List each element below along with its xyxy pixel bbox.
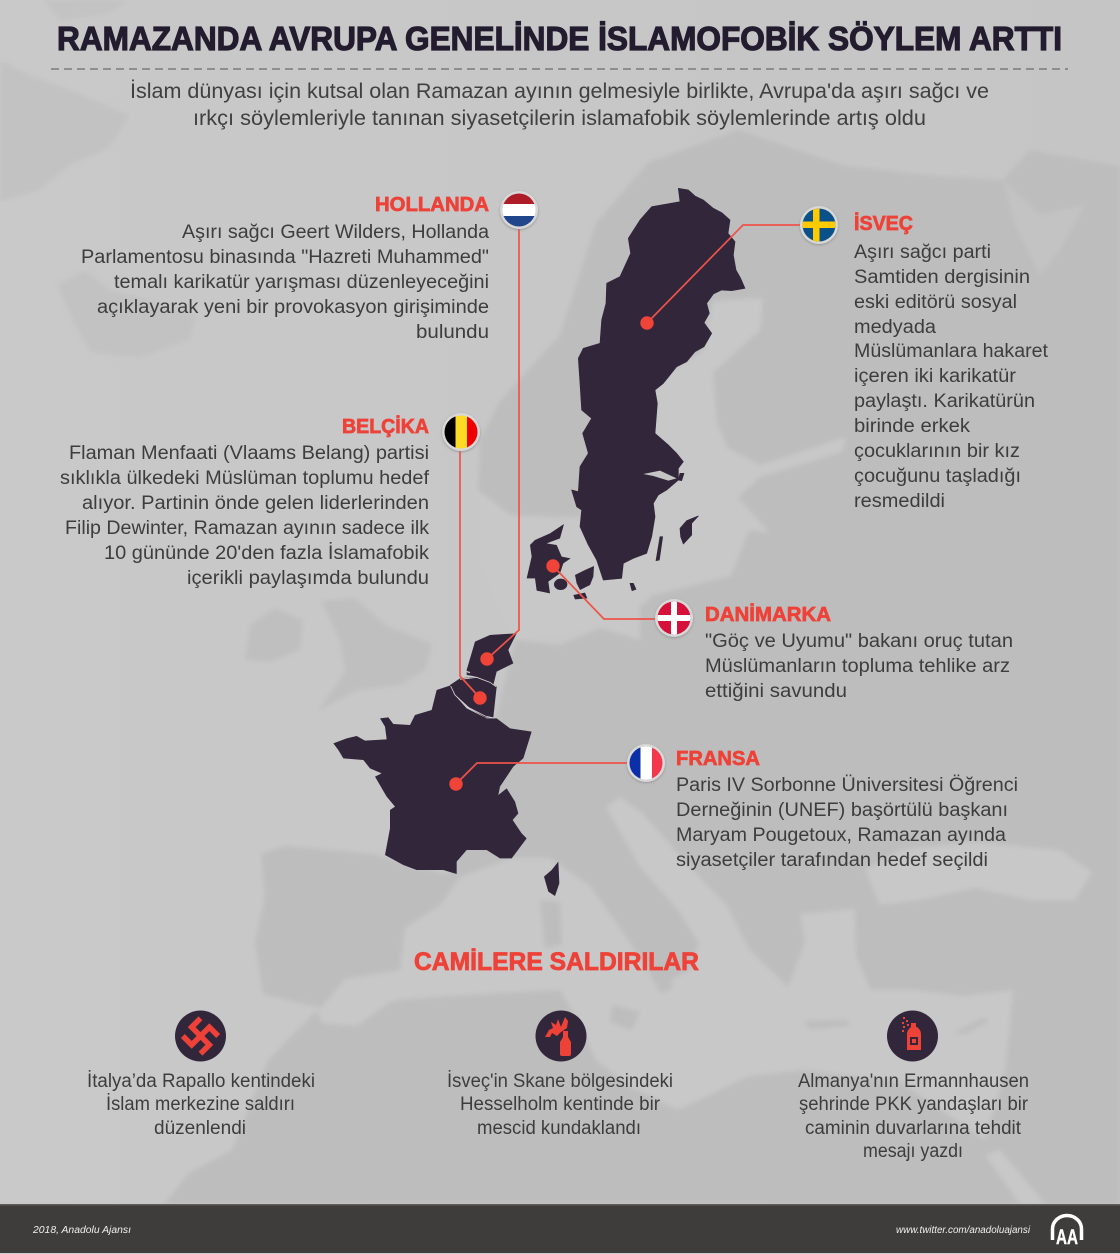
panel: Hollanda (81, 191, 538, 343)
text: Germany: şehrinde PKK yandaşları bir (799, 1094, 1029, 1115)
panel: Italy attack (87, 1010, 315, 1139)
intro text: ırkçı söylemleriyle tanınan siyasetçilerin islamafobik söylemlerinde artış oldu (193, 107, 926, 130)
footer bar (0, 1204, 1120, 1254)
text: İsveç: birinde erkek (854, 416, 971, 437)
text: Belçika: Flaman Menfaati (Vlaams Belang) partisi (69, 443, 429, 464)
text: Germany: caminin duvarlarına tehdit (805, 1118, 1022, 1139)
text: Hollanda: bulundu (416, 322, 489, 343)
title: RAMAZANDA AVRUPA GENELİNDE İSLAMOFOBİK SÖYLEM ARTTI (57, 20, 1062, 57)
text: İsveç: çocuklarının bir kız (854, 441, 1020, 462)
map: Corsica (544, 862, 559, 896)
text: İsveç: Aşırı sağcı parti (854, 242, 991, 263)
text: Belçika: sıklıkla ülkedeki Müslüman toplumu hedef (60, 468, 430, 489)
intro text: İslam dünyası için kutsal olan Ramazan ayının gelmesiyle birlikte, Avrupa'da aşırı sağcı ve (130, 80, 989, 103)
heading: Hollanda: HOLLANDA (375, 194, 489, 216)
text: Sweden: İsveç'in Skane bölgesindeki (447, 1071, 673, 1092)
panel: Sweden attack (447, 1010, 673, 1139)
text: Hollanda (81, 222, 489, 343)
panel: Germany attack (798, 1010, 1029, 1162)
text: İsveç: Samtiden dergisinin (854, 267, 1030, 288)
text: Fransa: siyasetçiler tarafından hedef seçildi (676, 850, 988, 871)
text: Danimarka: Müslümanların topluma tehlike arz (705, 656, 1010, 677)
text: Italy: İtalya’da Rapallo kentindeki (87, 1071, 315, 1092)
connector lines (456, 225, 801, 784)
text: Belçika: alıyor. Partinin önde gelen liderlerinden (82, 493, 429, 514)
flag: France (627, 744, 665, 782)
text: Germany (798, 1071, 1029, 1162)
text: Germany: mesajı yazdı (863, 1141, 963, 1162)
heading: Fransa: FRANSA (676, 748, 760, 770)
text: İsveç: medyada (854, 317, 936, 338)
text: Hollanda: Parlamentosu binasında "Hazreti Muhammed" (81, 247, 489, 268)
icon: spray can (887, 1010, 938, 1062)
footer credit: 2018, Anadolu Ajansı (32, 1225, 131, 1236)
flag: Denmark (655, 599, 693, 637)
text: Danimarka: "Göç ve Uyumu" bakanı oruç tutan (705, 631, 1013, 652)
panel: Fransa (627, 744, 1018, 871)
text: Sweden (447, 1071, 673, 1139)
text: İsveç: çocuğunu taşladığı (854, 466, 1021, 487)
text: Hollanda: açıklayarak yeni bir provokasyon girişiminde (97, 297, 489, 318)
text: Belçika: Filip Dewinter, Ramazan ayının sadece ilk (65, 518, 430, 539)
panel: Belçika (60, 413, 480, 589)
text: Germany: Almanya'nın Ermannhausen (798, 1071, 1029, 1092)
flag: Belgium (442, 413, 480, 451)
text: Danimarka: ettiğini savundu (705, 681, 847, 702)
text: Fransa: Paris IV Sorbonne Üniversitesi Öğrenci (676, 775, 1018, 796)
heading: Danimarka: DANİMARKA (705, 603, 831, 626)
intro text (130, 80, 989, 130)
text: Belçika: 10 gününde 20'den fazla İslamafobik (104, 543, 430, 564)
text: İsveç: paylaştı. Karikatürün (854, 391, 1035, 412)
text: Italy (87, 1071, 315, 1139)
text: Fransa (676, 775, 1018, 871)
text: İsveç: resmedildi (854, 491, 945, 512)
text: İsveç: eski editörü sosyal (854, 292, 1017, 313)
flag: Sweden (800, 206, 838, 244)
text: Hollanda: temalı karikatür yarışması düzenleyeceğini (114, 272, 489, 293)
text: Belçika (60, 443, 430, 589)
panel: Danimarka (655, 599, 1013, 702)
heading: İsveç: İSVEÇ (854, 212, 913, 235)
map: Denmark (527, 524, 594, 599)
icon: swastika (175, 1010, 226, 1062)
logo: AA (1052, 1216, 1082, 1249)
heading: Belçika: BELÇİKA (342, 415, 429, 438)
flag: Netherlands (500, 191, 538, 229)
text: Fransa: Derneğinin (UNEF) başörtülü başkanı (676, 800, 1008, 821)
section heading: Camilere Saldırılar: CAMİLERE SALDIRILAR (414, 948, 699, 976)
panel: İsveç (800, 206, 1049, 512)
marker dots (449, 316, 654, 791)
text: Sweden: mescid kundaklandı (477, 1118, 641, 1139)
map: Swedish islands (630, 473, 698, 591)
text: İsveç: Müslümanlara hakaret (854, 341, 1049, 362)
text: İsveç: içeren iki karikatür (854, 366, 1017, 387)
text: İsveç (854, 242, 1049, 512)
text: Danimarka (705, 631, 1013, 702)
text: Italy: İslam merkezine saldırı (106, 1094, 295, 1115)
icon: molotov cocktail (536, 1010, 586, 1062)
map: Sweden (572, 188, 745, 591)
logo: AA: AA (1056, 1226, 1078, 1249)
text: Sweden: Hesselholm kentinde bir (460, 1094, 661, 1115)
map: France, Belgium and Netherlands (333, 633, 559, 896)
text: Fransa: Maryam Pougetoux, Ramazan ayında (676, 825, 1006, 846)
text: Italy: düzenlendi (154, 1118, 246, 1139)
text: Belçika: içerikli paylaşımda bulundu (187, 568, 429, 589)
text: Hollanda: Aşırı sağcı Geert Wilders, Hollanda (182, 222, 489, 243)
footer url: www.twitter.com/anadoluajansi (896, 1225, 1031, 1236)
